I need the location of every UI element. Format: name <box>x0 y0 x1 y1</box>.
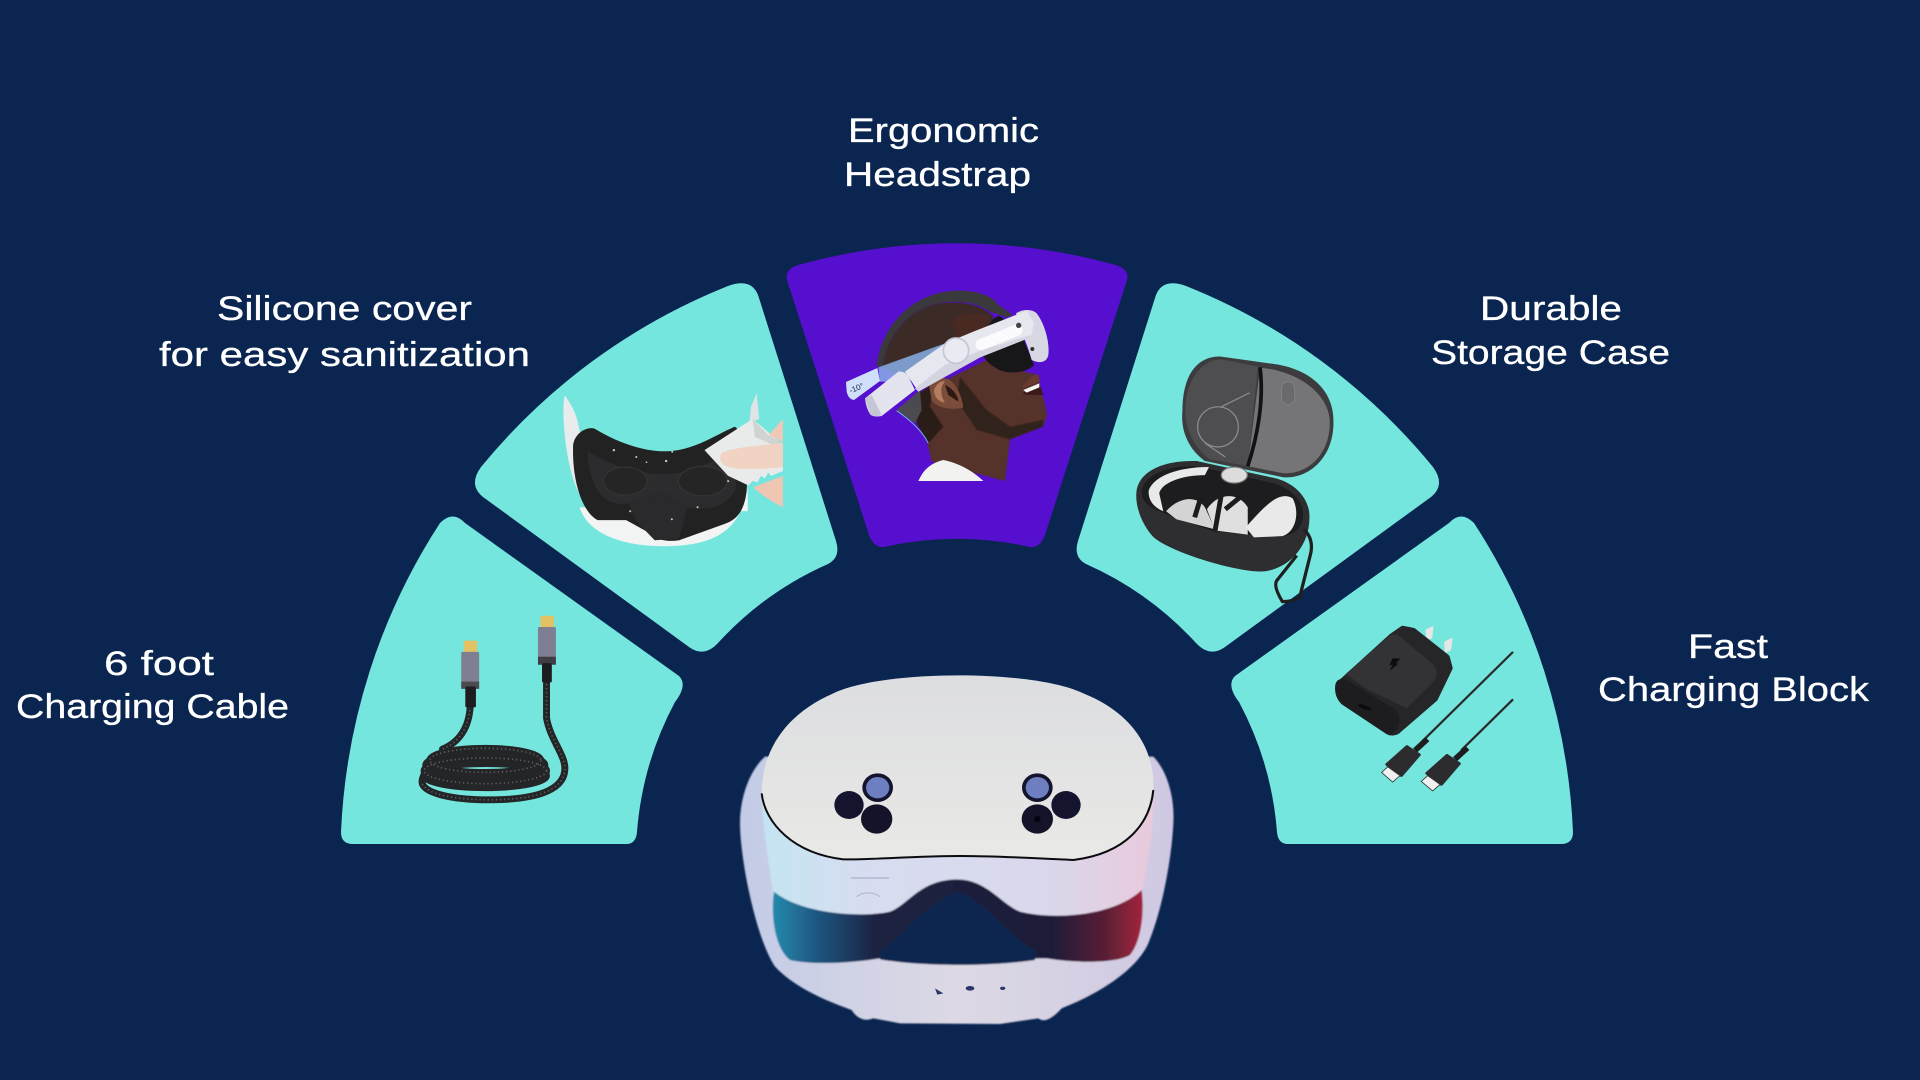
panel shape: charging block wedge <box>1231 516 1573 844</box>
left camera cluster <box>834 773 893 834</box>
headset plate lower edge <box>762 790 1153 860</box>
panel shape: cable wedge <box>341 516 683 844</box>
headset: VR headset front view <box>740 675 1174 1024</box>
right camera cluster <box>1022 773 1081 834</box>
label: Durable Storage Case: Durable <box>1480 290 1622 328</box>
headset outer shell and strap <box>740 757 1174 1024</box>
panel: ergonomic headstrap <box>787 243 1127 547</box>
icon: braided USB-C cable <box>422 616 565 800</box>
headset strap markings <box>851 877 1005 995</box>
panel shape: storage case wedge <box>1077 283 1439 652</box>
label: 6 foot Charging Cable <box>16 645 289 726</box>
panel shape: silicone wedge <box>475 283 837 652</box>
panel: fast charging block <box>1231 516 1573 844</box>
headset front band <box>762 797 1153 917</box>
panel: storage case <box>1077 283 1439 652</box>
label: Durable Storage Case <box>1431 290 1670 372</box>
headset dark face pad <box>773 879 1143 963</box>
icon: USB-C wall charger and cables <box>1335 626 1513 791</box>
headset nose opening <box>880 892 1037 965</box>
label: Silicone cover for easy sanitization <box>159 290 530 374</box>
label: Ergonomic Headstrap: Ergonomic <box>848 112 1039 150</box>
label: Ergonomic Headstrap <box>844 112 1039 194</box>
panel: silicone cover <box>475 283 837 652</box>
label: Silicone cover for easy sanitization: for easy sanitization <box>159 336 530 374</box>
label: Fast Charging Block: Charging Block <box>1598 671 1870 709</box>
panel shape: headstrap wedge <box>787 243 1127 547</box>
headset top plate <box>762 675 1153 860</box>
icon: man wearing headset with elite strap <box>846 291 1049 481</box>
icon: silicone face cover with cleaning cloth <box>563 393 783 546</box>
label: 6 foot Charging Cable: 6 foot <box>104 645 215 683</box>
label: Durable Storage Case: Storage Case <box>1431 334 1670 372</box>
label: 6 foot Charging Cable: Charging Cable <box>16 688 289 726</box>
panel: charging cable <box>341 516 683 844</box>
label: Fast Charging Block: Fast <box>1688 628 1769 666</box>
label: Ergonomic Headstrap: Headstrap <box>844 156 1031 194</box>
label: Fast Charging Block <box>1598 628 1870 709</box>
label: Silicone cover for easy sanitization: Silicone cover <box>217 290 472 328</box>
text: tilt angle tag: -10° <box>848 381 865 395</box>
icon: open hard-shell carrying case <box>1136 357 1333 602</box>
